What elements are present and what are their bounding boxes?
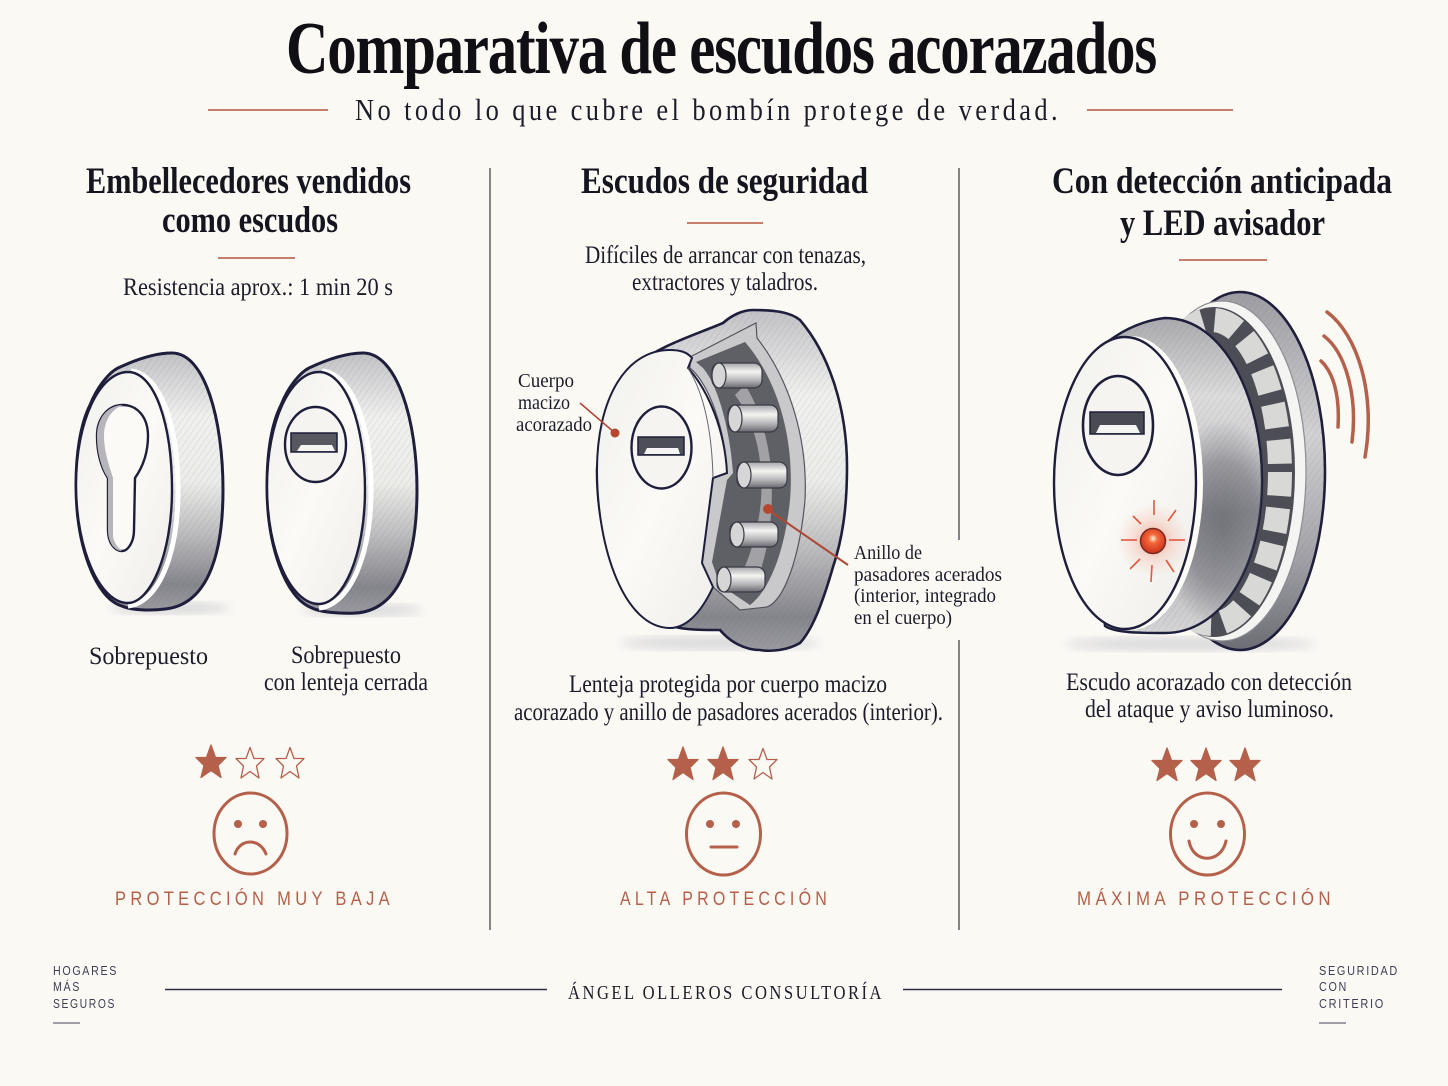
title: Comparativa de escudos acorazados bbox=[286, 8, 1156, 90]
rating label: muy baja: PROTECCIÓN MUY BAJA bbox=[115, 888, 394, 910]
icon: sad face bbox=[214, 793, 287, 874]
heading: embellecedores bbox=[86, 161, 411, 258]
heading: deteccion: Con detección anticipada bbox=[1052, 161, 1392, 202]
panel: deteccion anticipada bbox=[1052, 161, 1392, 910]
description bbox=[1066, 669, 1352, 723]
description bottom: acorazado y anillo de pasadores acerados (interior). bbox=[514, 699, 943, 726]
callout: anillo de pasadores: (interior, integrado bbox=[854, 586, 996, 607]
description top: Difíciles de arrancar con tenazas, bbox=[585, 242, 866, 269]
label: sobrepuesto con lenteja cerrada: con lenteja cerrada bbox=[264, 669, 428, 696]
description: del ataque y aviso luminoso. bbox=[1085, 696, 1334, 723]
panel: embellecedores bbox=[76, 161, 428, 910]
icon: open escutcheon bbox=[76, 353, 230, 614]
footer left note: HOGARES bbox=[53, 963, 118, 978]
icon: closed lens escutcheon bbox=[267, 353, 422, 616]
footer center brand: ÁNGEL OLLEROS CONSULTORÍA bbox=[568, 981, 884, 1004]
pins bbox=[712, 363, 787, 592]
heading: escudos de seguridad: Escudos de seguridad bbox=[581, 161, 868, 202]
description top: extractores y taladros. bbox=[632, 269, 818, 296]
callout: anillo de pasadores bbox=[763, 504, 1002, 629]
footer right note: CRITERIO bbox=[1319, 996, 1385, 1011]
footer left note: SEGUROS bbox=[53, 996, 116, 1011]
footer bbox=[53, 963, 1399, 1023]
heading: embellecedores: como escudos bbox=[162, 200, 338, 241]
callout: anillo de pasadores: Anillo de bbox=[854, 543, 922, 564]
label: sobrepuesto con lenteja cerrada: Sobrepuesto bbox=[291, 642, 401, 669]
footer right note: CON bbox=[1319, 979, 1348, 994]
subtitle: No todo lo que cubre el bombín protege de verdad. bbox=[355, 92, 1061, 127]
icon: happy face bbox=[1170, 793, 1244, 875]
callout: cuerpo macizo: Cuerpo bbox=[518, 371, 574, 392]
LED bbox=[1117, 504, 1189, 576]
callout: anillo de pasadores: pasadores acerados bbox=[854, 565, 1002, 586]
description bottom: Lenteja protegida por cuerpo macizo bbox=[569, 671, 887, 698]
footer right note: SEGURIDAD bbox=[1319, 963, 1399, 978]
rating stars: two of three bbox=[668, 747, 777, 780]
callout: anillo de pasadores: en el cuerpo) bbox=[854, 608, 952, 629]
rating label: maxima: MÁXIMA PROTECCIÓN bbox=[1077, 888, 1335, 910]
callout: cuerpo macizo bbox=[516, 371, 620, 438]
front face bbox=[1059, 336, 1203, 630]
column dividers bbox=[490, 168, 959, 930]
icon: armoured escutcheon cutaway bbox=[597, 310, 847, 651]
description top bbox=[585, 242, 866, 296]
rating stars: three of three bbox=[1152, 748, 1260, 780]
icon: neutral face bbox=[686, 793, 760, 875]
label: sobrepuesto: Sobrepuesto bbox=[89, 643, 208, 670]
rating stars: one of three bbox=[196, 745, 304, 778]
description: Escudo acorazado con detección bbox=[1066, 669, 1352, 696]
panel: escudos de seguridad bbox=[514, 161, 1002, 910]
label: sobrepuesto con lenteja cerrada bbox=[264, 642, 428, 696]
heading: embellecedores: Embellecedores vendidos bbox=[86, 161, 411, 202]
footer left note bbox=[53, 963, 118, 1023]
description bottom bbox=[514, 671, 943, 726]
cut rim bbox=[690, 323, 805, 610]
callout: cuerpo macizo: macizo bbox=[518, 393, 570, 414]
heading: deteccion: y LED avisador bbox=[1120, 203, 1325, 244]
icon: LED escutcheon bbox=[1054, 292, 1325, 651]
rating label: alta: ALTA PROTECCIÓN bbox=[620, 888, 831, 910]
resistance text: Resistencia aprox.: 1 min 20 s bbox=[123, 274, 393, 301]
footer left note: MÁS bbox=[53, 979, 81, 994]
footer right note bbox=[1319, 963, 1399, 1023]
heading: deteccion bbox=[1052, 161, 1392, 260]
callout: cuerpo macizo: acorazado bbox=[516, 415, 592, 436]
icon: alarm signal waves bbox=[1321, 312, 1368, 457]
back ring bbox=[1155, 292, 1325, 650]
teeth bbox=[1133, 307, 1295, 637]
mid body bbox=[1078, 318, 1262, 633]
